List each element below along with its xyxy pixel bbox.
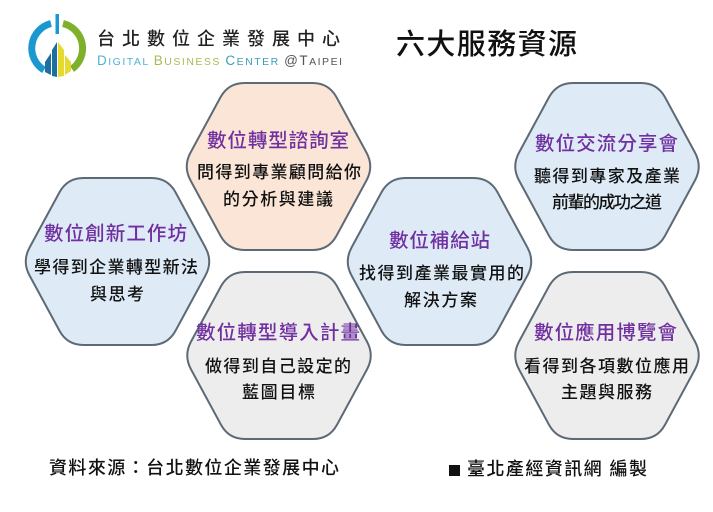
description [359, 263, 524, 310]
logo Chinese name: 台北數位企業發展中心 [97, 28, 340, 49]
panel: application expo [515, 272, 699, 439]
description: 主題與服務 [561, 383, 652, 402]
heading: 數位應用博覽會 [534, 321, 677, 344]
heading: 數位創新工作坊 [44, 223, 187, 245]
source note: 資料來源：台北數位企業發展中心 [49, 457, 339, 478]
panel: implementation plan [187, 272, 371, 439]
description: 藍圖目標 [242, 383, 315, 402]
description: 看得到各項數位應用 [524, 356, 689, 376]
description: 的分析與建議 [223, 190, 333, 209]
description [534, 166, 680, 212]
panel: supply station [348, 178, 531, 345]
icon: logo ring and buildings [32, 14, 83, 77]
description: 解決方案 [404, 290, 477, 310]
publisher note: 臺北產經資訊網 編製 [467, 459, 647, 479]
description: 找得到產業最實用的 [359, 263, 524, 283]
description: 聽得到專家及產業 [534, 166, 680, 186]
icon: square bullet [449, 465, 460, 476]
description: 問得到專業顧問給你 [197, 163, 361, 182]
panel: consulting room [187, 83, 370, 250]
heading: 數位交流分享會 [535, 133, 678, 155]
description: 學得到企業轉型新法 [34, 257, 198, 277]
heading: 數位補給站 [389, 230, 490, 252]
logo English name: DIGITAL BUSINESS CENTER @TAIPEI [97, 53, 342, 68]
logo [32, 14, 342, 77]
description [524, 356, 689, 402]
heading: 數位轉型導入計畫 [196, 322, 360, 344]
title: 六大服務資源 [396, 28, 577, 61]
panel: innovation workshop [26, 178, 209, 345]
heading: 數位轉型諮詢室 [207, 130, 349, 152]
description [197, 163, 361, 209]
description: 前輩的成功之道 [552, 192, 662, 212]
description: 做得到自己設定的 [205, 356, 351, 376]
description [205, 356, 351, 402]
description [34, 257, 198, 304]
description: 與思考 [90, 285, 144, 304]
panel: sharing session [515, 83, 699, 250]
